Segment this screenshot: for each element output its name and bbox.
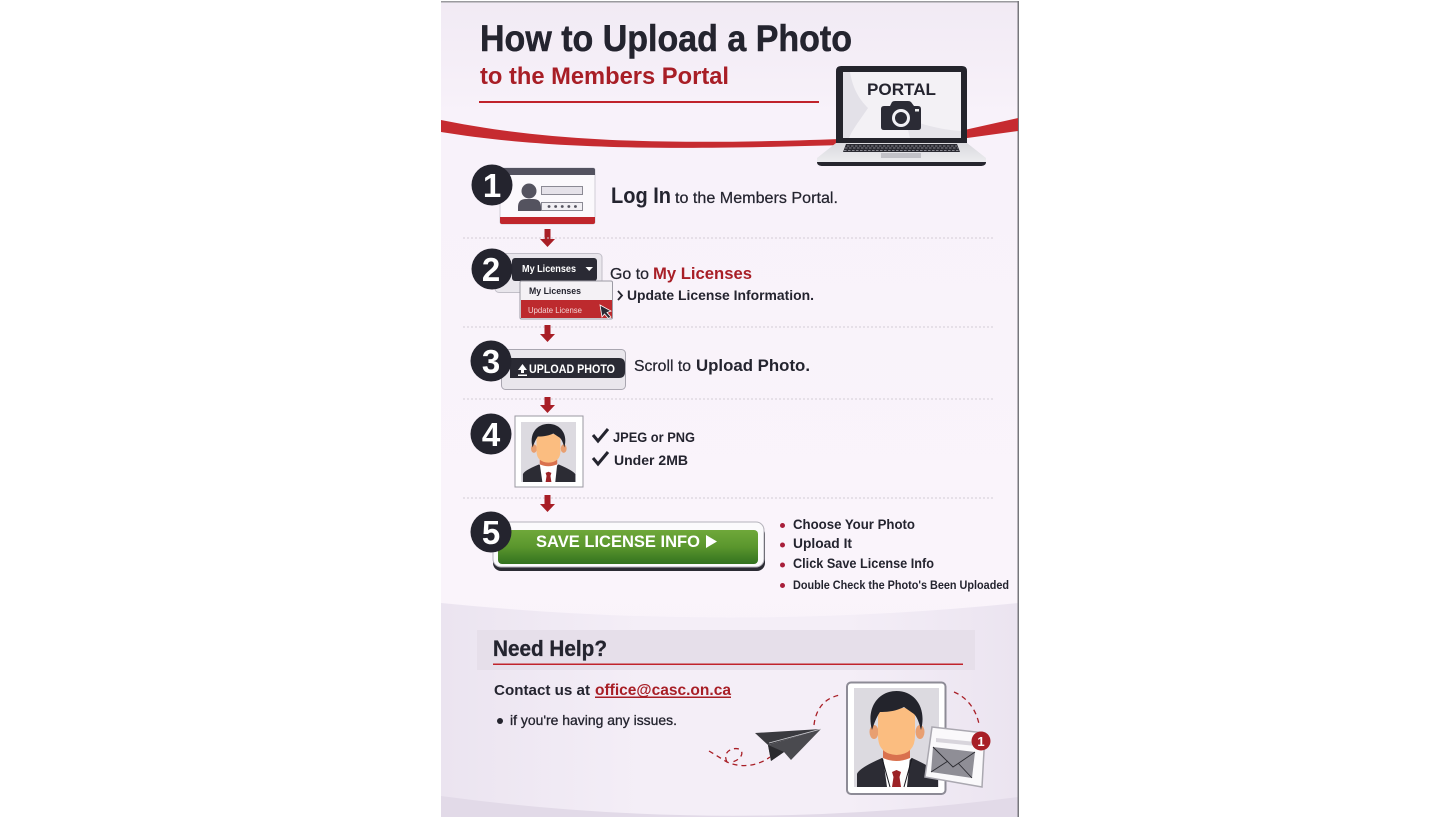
bullet list: Upload It xyxy=(793,536,853,551)
title underline xyxy=(479,101,819,103)
checklist: JPEG or PNG xyxy=(613,430,695,445)
save license button xyxy=(493,522,765,571)
icon: cursor xyxy=(600,305,611,318)
step 5 xyxy=(470,512,1009,592)
icon: paper plane xyxy=(755,729,821,761)
number badge 5 xyxy=(470,512,512,552)
profile photo card xyxy=(847,682,946,794)
number badge 1 xyxy=(472,164,512,206)
my licenses button: My Licenses xyxy=(522,263,576,275)
step 2 text xyxy=(610,264,814,303)
dashed divider xyxy=(463,398,995,400)
step 2 xyxy=(472,248,814,319)
title: How to Upload a Photo xyxy=(480,18,852,59)
issues note: if you're having any issues. xyxy=(510,712,677,728)
notification badge: 1 xyxy=(977,734,985,749)
number badge 4: 4 xyxy=(482,416,501,453)
upload card: UPLOAD PHOTO xyxy=(529,362,615,376)
dashed divider xyxy=(463,326,995,328)
checklist xyxy=(593,429,695,468)
contact text: Contact us at xyxy=(494,683,590,699)
arrow 4 xyxy=(540,495,555,512)
icon: laptop with portal camera xyxy=(817,66,986,166)
number badge 5: 5 xyxy=(482,514,500,551)
page background xyxy=(441,1,1019,817)
number badge 4 xyxy=(470,414,512,454)
red swoosh xyxy=(441,118,1018,148)
bullet list: Double Check the Photo's Been Uploaded xyxy=(793,580,1009,592)
step 3 text: Scroll to xyxy=(634,358,691,375)
upload card xyxy=(502,350,626,390)
dashed divider xyxy=(463,497,995,499)
step 1 text: to the Members Portal. xyxy=(675,190,838,207)
icon: envelope notification xyxy=(925,727,990,787)
step 4 xyxy=(470,414,695,487)
icon: camera xyxy=(881,101,921,130)
subtitle: to the Members Portal xyxy=(480,63,729,90)
checklist: Under 2MB xyxy=(614,453,688,468)
contact text xyxy=(494,682,731,699)
dropdown menu xyxy=(520,281,612,319)
dashed divider xyxy=(463,237,995,239)
need help heading xyxy=(477,630,975,670)
arrow 1 xyxy=(540,229,555,247)
contact text: office@casc.on.ca xyxy=(595,682,731,699)
step 2 text: Update License Information. xyxy=(627,287,814,303)
number badge 2: 2 xyxy=(482,251,500,288)
my licenses button xyxy=(512,258,597,281)
step 2 text: My Licenses xyxy=(653,264,752,283)
bullet list xyxy=(780,517,1009,592)
save license button: SAVE LICENSE INFO xyxy=(536,532,700,551)
step 3 text xyxy=(634,356,810,375)
step 2 text: Go to xyxy=(610,266,649,283)
photo frame xyxy=(515,416,583,487)
number badge 2 xyxy=(472,248,512,290)
step 3 xyxy=(470,340,810,390)
need help heading: Need Help? xyxy=(493,636,607,661)
dropdown menu: My Licenses xyxy=(529,286,581,297)
flight path dashes xyxy=(709,692,979,766)
number badge 1: 1 xyxy=(483,167,501,204)
dropdown menu: Update License xyxy=(528,305,582,315)
portal label: PORTAL xyxy=(867,80,936,99)
dropdown back card xyxy=(495,254,602,292)
login card xyxy=(500,168,595,224)
step 1 text: Log In xyxy=(611,183,671,208)
number badge 3 xyxy=(470,340,512,382)
arrow 2 xyxy=(540,325,555,342)
bullet list: Click Save License Info xyxy=(793,556,934,571)
bullet list: Choose Your Photo xyxy=(793,517,915,532)
step 1 xyxy=(472,164,838,224)
arrow 3 xyxy=(540,397,555,413)
number badge 3: 3 xyxy=(482,343,500,380)
step 3 text: Upload Photo. xyxy=(696,356,810,375)
step 1 text xyxy=(611,183,838,208)
